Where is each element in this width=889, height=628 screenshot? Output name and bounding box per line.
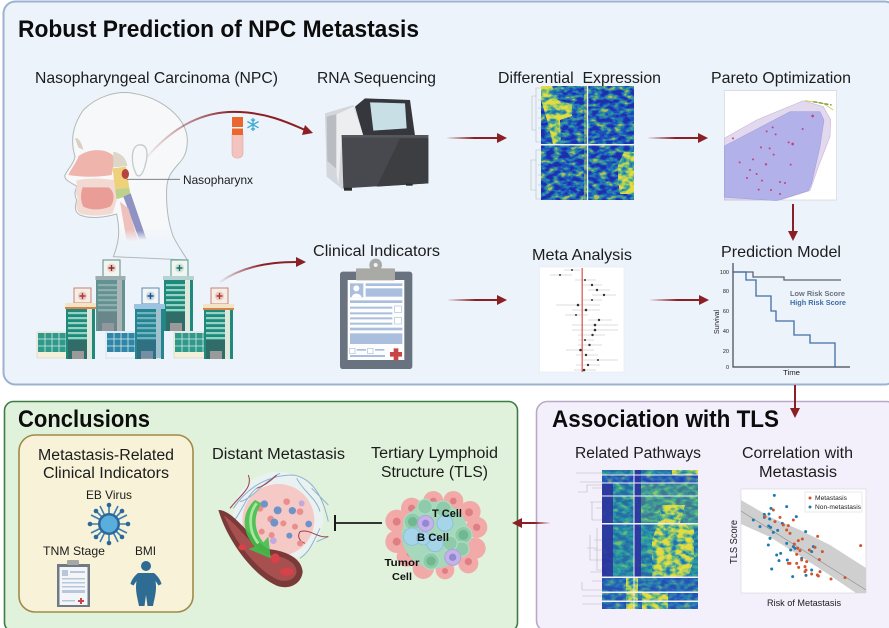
hospital: green tower <box>163 260 194 331</box>
arrow: meta to prediction <box>650 295 709 305</box>
chart: forest plot meta analysis <box>540 267 624 372</box>
arrow: NPC to RNA sequencing <box>147 112 313 157</box>
panel: association with TLS <box>536 402 889 628</box>
arrow: RNA seq to expression <box>447 133 507 143</box>
heading: tertiary lymphoid: Tertiary Lymphoid <box>371 445 498 462</box>
heading: prediction model: Prediction Model <box>721 244 841 261</box>
label: BMI: BMI <box>135 544 156 558</box>
chart: survival curves: 100 <box>720 270 729 276</box>
hospital: grey tower <box>95 260 126 331</box>
hospital: centre <box>106 288 165 359</box>
arrow: clinical to meta <box>448 295 507 305</box>
icon: virus <box>88 503 130 545</box>
title: robust prediction: Robust Prediction of NPC Metastasis <box>18 16 419 43</box>
icon: clinical clipboard <box>340 259 412 369</box>
icon: tertiary lymphoid structure <box>385 491 487 579</box>
icon: head anatomy with nasopharynx <box>65 92 187 260</box>
legend: scatter groups <box>805 492 862 512</box>
heading: clinical indicators: Clinical Indicators <box>43 465 169 482</box>
arrow: association to conclusions <box>512 518 550 528</box>
chart: survival curves: 40 <box>723 329 729 335</box>
title: conclusions: Conclusions <box>18 406 150 433</box>
heading: related pathways: Related Pathways <box>575 445 701 462</box>
icon: inhibition line <box>335 515 382 531</box>
heading: differential expression: Differential Expression <box>498 70 661 87</box>
icon: tumor with blood vessel <box>218 472 328 587</box>
axis label: time: Time <box>783 368 800 377</box>
box: metastasis-related clinical indicators <box>19 435 193 612</box>
heading: structure TLS: Structure (TLS) <box>381 464 488 481</box>
hospital: right <box>174 288 234 359</box>
arrow: prediction to association <box>790 385 800 418</box>
arrow: pareto to prediction <box>788 204 798 241</box>
label: EB virus: EB Virus <box>86 488 132 502</box>
heading: correlation with: Correlation with <box>742 445 853 462</box>
heading: nasopharyngeal carcinoma: Nasopharyngeal Carcinoma (NPC) <box>35 70 278 87</box>
legend: high risk: High Risk Score <box>790 298 846 307</box>
chart: survival curves: 80 <box>723 289 729 295</box>
icon: report clipboard <box>57 560 90 607</box>
label: cell: Cell <box>392 571 412 583</box>
axis label: risk of metastasis: Risk of Metastasis <box>767 598 841 609</box>
chart: survival curves: 0 <box>726 365 729 371</box>
label: tumor: Tumor <box>384 557 420 569</box>
heading: metastasis-related: Metastasis-Related <box>38 447 174 464</box>
icon: sequencing machine <box>325 98 428 191</box>
panel: robust prediction of NPC metastasis <box>4 2 889 384</box>
heading: RNA sequencing: RNA Sequencing <box>317 70 436 87</box>
heading: distant metastasis: Distant Metastasis <box>212 446 345 463</box>
arrow: expression to pareto <box>648 133 708 143</box>
chart: survival curves: 60 <box>723 309 729 315</box>
icon: frozen sample tube <box>232 117 259 158</box>
label: TNM stage: TNM Stage <box>43 544 105 558</box>
label: T cell: T Cell <box>432 508 462 520</box>
label: nasopharynx: Nasopharynx <box>183 173 253 187</box>
icon: hospitals <box>37 260 234 359</box>
label: B cell: B Cell <box>417 532 449 544</box>
axis label: survival: Survival <box>712 310 721 334</box>
arrow: hospitals to clinical indicators <box>220 257 306 282</box>
chart: pathway heatmap <box>576 470 698 609</box>
chart: differential expression heatmap <box>531 86 634 200</box>
icon: person <box>130 561 162 606</box>
chart: pareto optimization polygons <box>724 91 837 201</box>
chart: scatter plot TLS score vs metastasis risk <box>729 489 866 609</box>
axis label: TLS score: TLS Score <box>729 520 740 564</box>
heading: metastasis: Metastasis <box>759 464 837 481</box>
legend: scatter groups: Non-metastasis <box>815 504 862 511</box>
heading: pareto optimization: Pareto Optimization <box>711 70 851 87</box>
legend: scatter groups: Metastasis <box>815 495 848 502</box>
title: association with TLS: Association with TLS <box>552 406 779 433</box>
panel: conclusions <box>4 402 518 628</box>
hospital: left <box>37 288 96 359</box>
legend: low risk: Low Risk Score <box>790 289 845 298</box>
heading: clinical indicators: Clinical Indicators <box>313 243 440 260</box>
chart: survival curves <box>712 263 850 377</box>
heading: meta analysis: Meta Analysis <box>532 247 632 264</box>
chart: survival curves: 20 <box>723 349 729 355</box>
